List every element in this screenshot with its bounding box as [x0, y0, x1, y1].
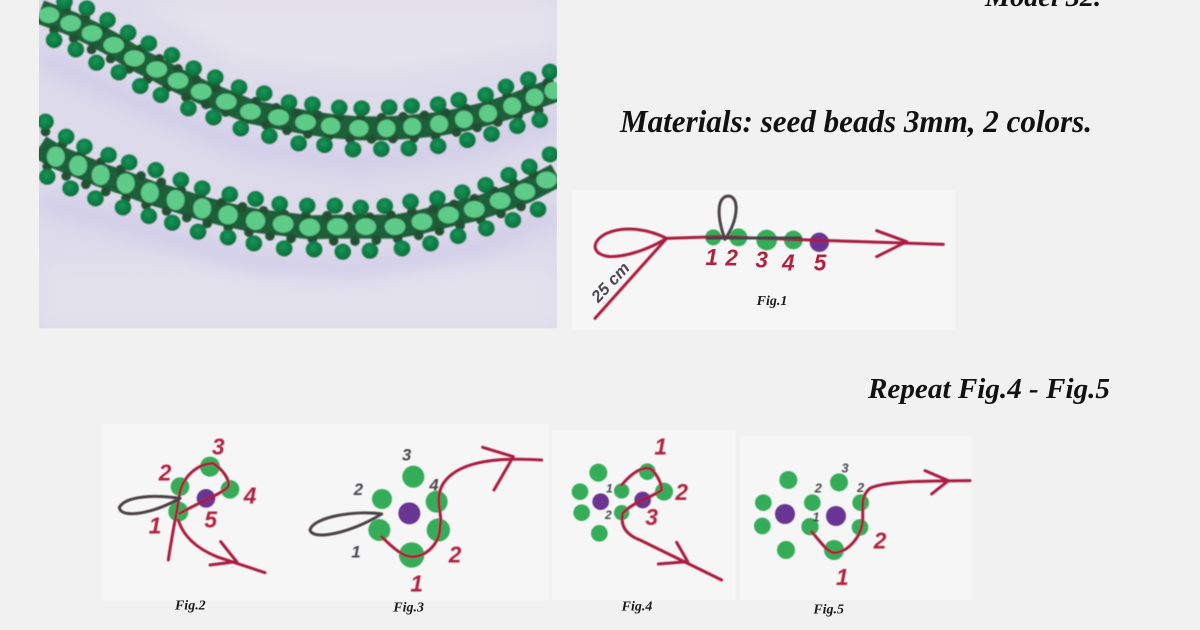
caption: Fig.3: Fig.3: [392, 600, 424, 615]
diagram: Fig.5: 3: [841, 462, 849, 476]
diagram: Fig.3: 1: [410, 571, 423, 597]
diagram: Fig.2: [119, 433, 265, 573]
diagram: Fig.5: 1: [836, 564, 849, 590]
diagram: Fig.3: [310, 446, 542, 597]
photo: beaded necklaces: [37, 0, 562, 328]
panel: Fig.4 and Fig.5 sketches: [552, 430, 972, 617]
diagram: Fig.4: 1: [654, 433, 667, 459]
heading: materials: Materials: seed beads 3mm, 2 colors.: [619, 103, 1092, 139]
bead numbers: [705, 244, 827, 276]
beads row: [705, 228, 829, 252]
diagram: Fig.5: 2: [873, 527, 887, 553]
necklace: upper strand: [39, 0, 562, 157]
diagram: Fig.5: [754, 462, 970, 590]
diagram: Fig.4: 2: [604, 508, 612, 522]
diagram: Fig.5: 2: [814, 482, 822, 496]
diagram: Fig.4: 3: [645, 504, 658, 530]
diagram: Fig.2: 3: [212, 433, 225, 459]
diagram: Fig.3: 3: [402, 446, 412, 465]
diagram: Fig.4: [572, 433, 722, 580]
caption: Fig.2: Fig.2: [174, 598, 206, 613]
diagram: Fig.2: 1: [149, 512, 161, 538]
diagram: Fig.3: 4: [428, 476, 439, 495]
necklace: lower strand: [37, 114, 558, 260]
bead numbers: 1: [705, 244, 718, 270]
caption: Fig.4: Fig.4: [621, 600, 652, 615]
diagram: Fig.4: 1: [606, 481, 613, 495]
diagram: Fig.3: 1: [351, 542, 361, 561]
diagram: Fig.3: 2: [353, 480, 364, 499]
bead numbers: 2: [724, 245, 738, 271]
bead numbers: 4: [781, 250, 795, 276]
thread length label: 25 cm: [587, 258, 634, 307]
diagram: Fig.4: 2: [674, 479, 688, 505]
thread with arrow: [595, 196, 943, 318]
diagram: Fig.2: 2: [158, 460, 172, 486]
panel: Fig.2 and Fig.3 sketches: [102, 424, 549, 615]
diagram: Fig.5: 2: [856, 481, 864, 495]
caption: Fig.1: Fig.1: [756, 294, 787, 309]
diagram: Fig.3: 2: [448, 542, 462, 568]
heading: repeat: Repeat Fig.4 - Fig.5: [867, 374, 1110, 405]
bead numbers: 5: [814, 250, 827, 276]
panel: Fig.1 sketch: [572, 190, 955, 330]
diagram: Fig.2: 4: [243, 482, 257, 508]
diagram: Fig.5: 1: [812, 510, 820, 524]
bead numbers: 3: [755, 246, 768, 272]
diagram: Fig.2: 5: [204, 506, 217, 532]
caption: Fig.5: Fig.5: [812, 602, 844, 617]
